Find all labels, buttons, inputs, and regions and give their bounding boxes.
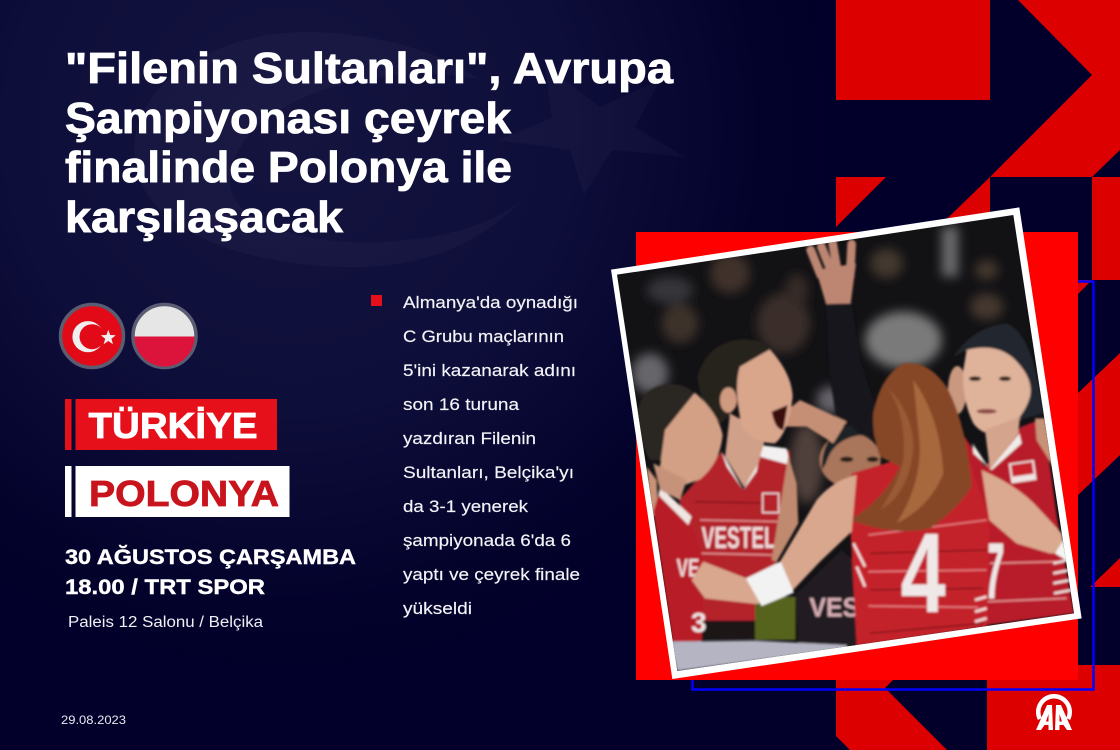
- raised arm sleeve: [826, 303, 877, 440]
- shouting player jersey: VESTEL: [702, 521, 776, 555]
- title: "Filenin Sultanları", Avrupa: [65, 44, 674, 93]
- back-left shoulder: [647, 467, 658, 517]
- match date and broadcaster: 30 AĞUSTOS ÇARŞAMBA: [65, 544, 356, 569]
- auburn ponytail: [850, 363, 972, 531]
- shouting player head: [697, 339, 793, 443]
- right player: [948, 323, 1074, 625]
- title: karşılaşacak: [65, 193, 344, 242]
- icon: Turkey flag: [60, 304, 124, 368]
- raised hand: [811, 243, 856, 304]
- red photo backing panel: [636, 232, 1078, 680]
- body text: şampiyonada 6'da 6: [403, 531, 571, 550]
- venue: Paleis 12 Salonu / Belçika: [68, 614, 263, 631]
- match date and broadcaster: 18.00 / TRT SPOR: [65, 575, 266, 599]
- dark jersey: VES: [809, 593, 859, 623]
- shouting player jersey: [679, 445, 792, 639]
- yellow-green stand: [755, 597, 796, 640]
- label: TÜRKİYE: [65, 399, 277, 450]
- back jersey: [851, 460, 989, 646]
- bullet marker: [371, 295, 382, 306]
- geometric shapes: red blocks: [836, 0, 1120, 750]
- body text: [403, 293, 580, 618]
- title: Şampiyonası çeyrek: [65, 94, 512, 143]
- title: [65, 44, 674, 242]
- icon: Poland flag: [133, 304, 196, 368]
- body text: C Grubu maçlarının: [403, 327, 564, 346]
- left player: VE: [677, 555, 699, 583]
- shouting player arm and neck: [783, 400, 847, 443]
- label: TÜRKİYE: TÜRKİYE: [88, 405, 258, 446]
- back jersey: 4: [901, 510, 946, 637]
- match date and broadcaster: [65, 544, 356, 599]
- photo: volleyball players: [607, 200, 1093, 683]
- left player: [637, 384, 723, 647]
- blue frame: [692, 282, 1094, 690]
- label: POLONYA: [65, 466, 290, 517]
- body text: son 16 turuna: [403, 395, 520, 414]
- date stamp: 29.08.2023: [61, 713, 126, 727]
- court floor: [670, 641, 847, 671]
- body text: da 3-1 yenerek: [403, 497, 529, 516]
- outstretched arms: [692, 475, 857, 604]
- title: finalinde Polonya ile: [65, 143, 512, 192]
- center player face: [819, 425, 881, 487]
- body text: Almanya'da oynadığı: [403, 293, 578, 312]
- photo white frame: [611, 207, 1082, 679]
- body text: 5'ini kazanarak adını: [403, 361, 576, 380]
- dark jersey: [797, 550, 863, 647]
- icon: AA logo: [1036, 694, 1072, 730]
- label: POLONYA: POLONYA: [89, 473, 279, 514]
- body text: Sultanları, Belçika'yı: [403, 463, 574, 482]
- right player: 7: [983, 526, 1005, 615]
- background emblem: crescent and star: [134, 32, 685, 267]
- left player: 3: [691, 607, 707, 638]
- body text: yazdıran Filenin: [403, 429, 536, 448]
- body text: yaptı ve çeyrek finale: [403, 565, 580, 584]
- body text: yükseldi: [403, 599, 472, 618]
